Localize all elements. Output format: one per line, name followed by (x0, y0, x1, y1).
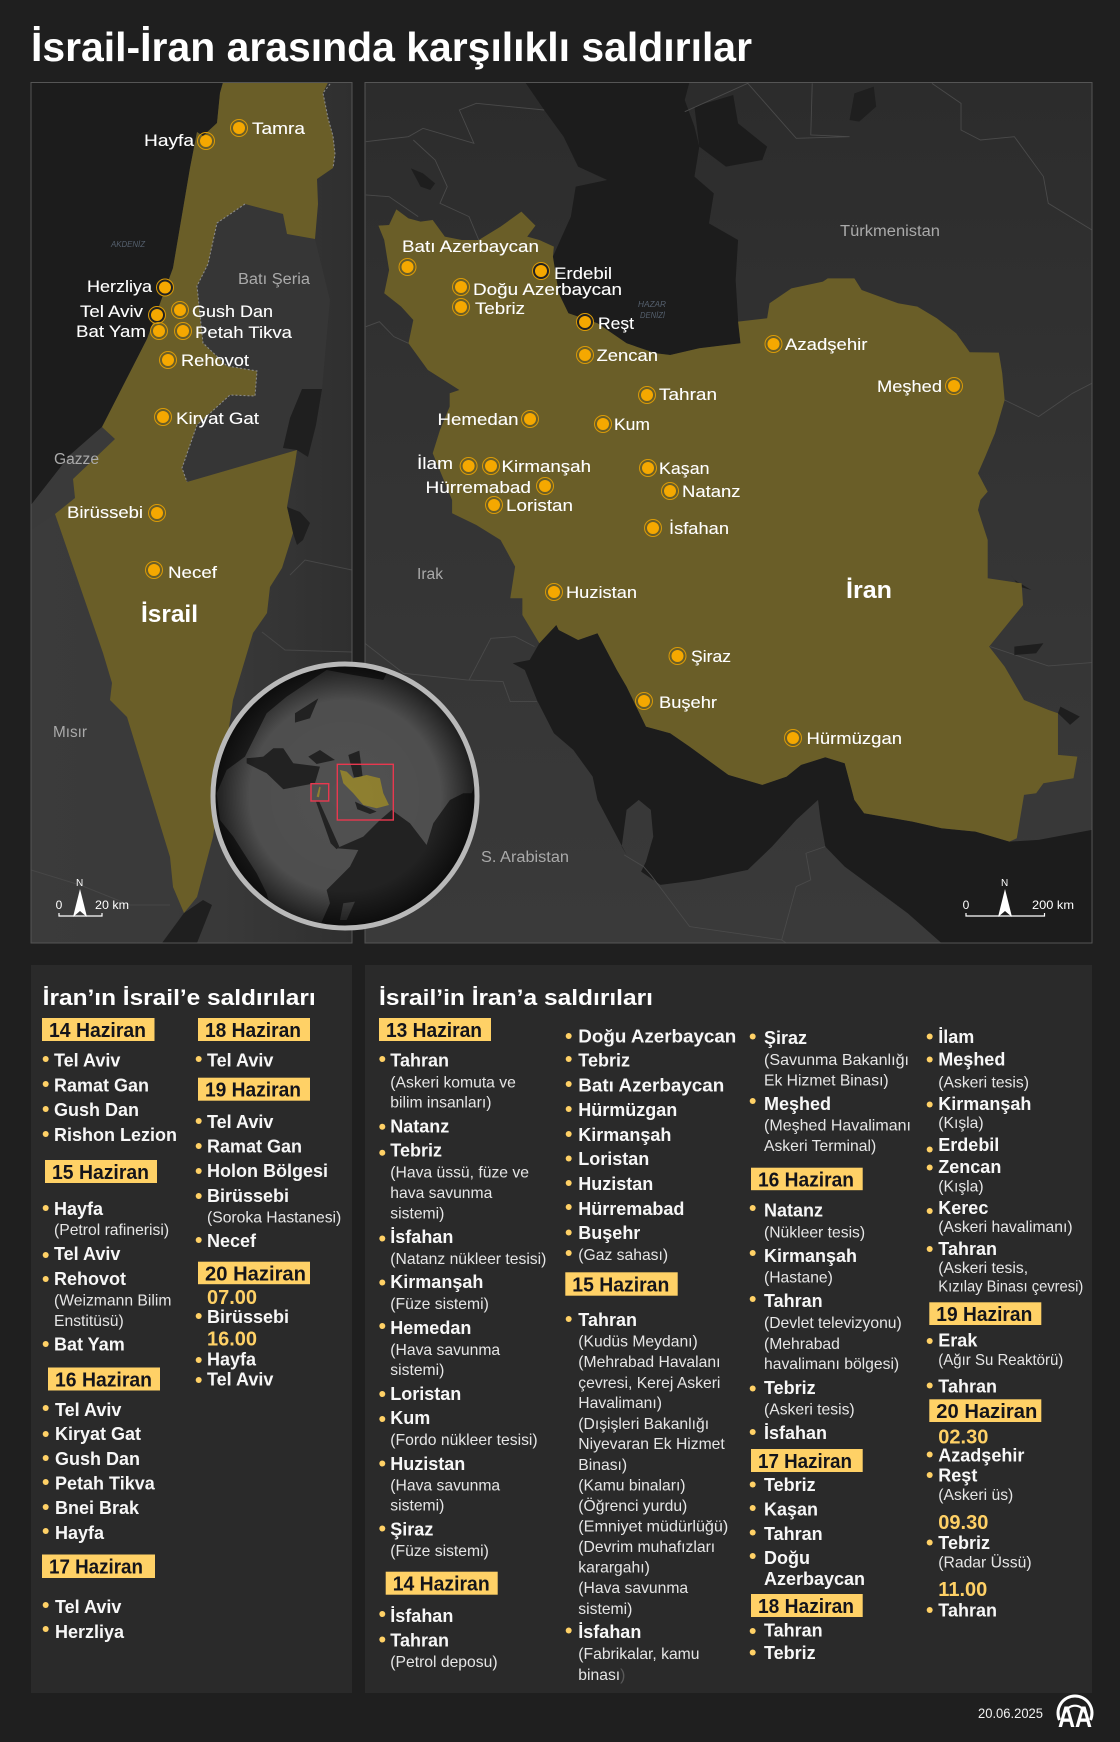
marker: Kirmanşah: Kirmanşah (502, 457, 591, 476)
marker: Birüssebi: Birüssebi (67, 503, 143, 522)
Dead Sea (283, 389, 322, 457)
marker: Hayfa: Hayfa (144, 131, 195, 150)
date block: 13 Haziran: sistemi) (390, 1362, 444, 1379)
marker: Meşhed: Meşhed (877, 377, 942, 396)
date block: 19 Haziran: Birüssebi (207, 1186, 289, 1206)
date block: 15 Haziran: (Kamu binaları) (578, 1478, 686, 1495)
date block: 18 Haziran: Tahran (938, 1239, 997, 1259)
list: 13 Haziran continued: Doğu Azerbaycan (578, 1026, 736, 1046)
label: İsrail: İsrail (141, 601, 198, 628)
date block: 13 Haziran: (Hava üssü, füze ve (390, 1165, 529, 1182)
marker: Hayfa (144, 131, 214, 150)
label: Türkmenistan: Türkmenistan (840, 223, 940, 240)
Red Sea (316, 802, 339, 849)
date block: 19 Haziran: Holon Bölgesi (207, 1161, 328, 1181)
marker: Erdebil: Erdebil (554, 264, 612, 283)
Iran territory (378, 209, 1077, 842)
marker: Tahran (638, 385, 717, 404)
marker: İlam (417, 454, 477, 474)
date block: 19 Haziran: (Ağır Su Reaktörü) (938, 1352, 1063, 1369)
date block: 15 Haziran: Binası) (578, 1457, 627, 1474)
date block: 18 Haziran: (Kışla) (938, 1179, 984, 1196)
marker: Kiryat Gat: Kiryat Gat (176, 409, 259, 428)
date block: 18 Haziran: Kirmanşah (938, 1094, 1031, 1114)
marker: Şiraz: Şiraz (691, 647, 731, 666)
marker: Hürmüzgan: Hürmüzgan (806, 729, 902, 748)
marker: Tamra (230, 119, 306, 138)
date block: 13 Haziran: Tebriz (390, 1141, 442, 1161)
date block: 19 Haziran: 19 Haziran (205, 1080, 301, 1102)
date block: 19 Haziran: Necef (207, 1231, 257, 1251)
date block: 20 Haziran: 16.00 (207, 1329, 257, 1351)
date block: 15 Haziran: (Petrol rafinerisi) (54, 1222, 169, 1239)
date block: 16 Haziran: 16 Haziran (758, 1170, 854, 1192)
date block: 15 Haziran: (Hava savunma (578, 1580, 688, 1597)
logo: Anadolu Agency: AA (1058, 1701, 1092, 1734)
marker: Reşt: Reşt (598, 314, 634, 333)
date block: 20 Haziran: 02.30 (938, 1426, 988, 1448)
date block: 14 Haziran (42, 1018, 177, 1145)
Black Sea (308, 750, 335, 764)
date block: 13 Haziran: Tahran (390, 1051, 449, 1071)
date block: 16 Haziran: (Askeri tesis) (764, 1401, 855, 1418)
date block: 15 Haziran (43, 1160, 171, 1355)
date block: 15 Haziran: (Dışişleri Bakanlığı (578, 1416, 709, 1433)
date block: 13 Haziran: Huzistan (390, 1454, 465, 1474)
date block: 14 Haziran (379, 1572, 498, 1671)
date block: 16 Haziran: Tebriz (764, 1378, 816, 1398)
date block: 16 Haziran: (Devlet televizyonu) (764, 1315, 902, 1332)
date block: 14 Haziran: Ramat Gan (54, 1076, 149, 1096)
Indian Ocean (322, 788, 474, 926)
date block: 18 Haziran: Meşhed (938, 1050, 1005, 1070)
date block: 18 Haziran: (Kışla) (938, 1115, 984, 1132)
date block: 14 Haziran: 14 Haziran (393, 1574, 490, 1596)
date block: 17 Haziran: Azerbaycan (764, 1569, 865, 1589)
date block: 16 Haziran: Tel Aviv (55, 1400, 121, 1420)
Gulf of Aqaba (162, 900, 212, 943)
date block: 20 Haziran: (Radar Üssü) (938, 1554, 1032, 1572)
marker: Loristan: Loristan (506, 496, 573, 515)
date block: 19 Haziran: Erak (938, 1331, 978, 1351)
Persian Gulf (355, 802, 377, 814)
list: 13 Haziran continued: Batı Azerbaycan (578, 1076, 724, 1096)
date block: 16 Haziran: Gush Dan (55, 1449, 140, 1469)
red locator box: Israel (311, 784, 329, 801)
date block: 20 Haziran: 09.30 (938, 1512, 988, 1534)
date block: 15 Haziran: çevresi, Kerej Askeri (578, 1375, 720, 1392)
date block: 16 Haziran: Tahran (764, 1291, 823, 1311)
date block: 15 Haziran: Askeri Terminal) (764, 1138, 876, 1155)
date block: 15 Haziran: Havalimanı) (578, 1395, 662, 1412)
date block: 19 Haziran (927, 1302, 1063, 1396)
list: 13 Haziran continued: Tebriz (578, 1051, 630, 1071)
scale bar: Israel map: N (76, 878, 83, 889)
panel: Iran map (365, 82, 1092, 943)
label: Akdeniz: AKDENİZ (110, 239, 146, 249)
Caspian Sea (525, 82, 740, 355)
marker: Zencan (576, 346, 658, 365)
date block: 18 Haziran: Tahran (764, 1621, 823, 1641)
date block: 15 Haziran: (Mehrabad Havalanı (578, 1354, 720, 1371)
date block: 18 Haziran (750, 1027, 1083, 1663)
date block: 16 Haziran: Bnei Brak (55, 1498, 140, 1518)
date block: 15 Haziran: (Meşhed Havalimanı (764, 1118, 911, 1135)
scale bar: Iran map (963, 878, 1074, 917)
date block: 13 Haziran: bilim insanları) (390, 1095, 491, 1112)
date block: 16 Haziran: Hayfa (55, 1523, 105, 1543)
marker: Petah Tikva: Petah Tikva (195, 323, 293, 342)
marker: Necef: Necef (168, 563, 217, 582)
date block: 20 Haziran: Tahran (938, 1601, 997, 1621)
label: Hazar Denizi: HAZAR (638, 299, 666, 309)
date stamp: 20.06.2025 (978, 1706, 1043, 1721)
label: Batı Şeria: Batı Şeria (238, 271, 310, 288)
inland lakes (411, 168, 435, 190)
date block: 16 Haziran (43, 1368, 160, 1543)
date block: 20 Haziran: Reşt (938, 1466, 977, 1486)
date block: 15 Haziran: binası) (578, 1667, 625, 1684)
date block: 15 Haziran: karargahı) (578, 1560, 650, 1577)
label: Mısır: Mısır (53, 724, 87, 741)
Madagascar (340, 902, 355, 920)
list: 13 Haziran continued: Kirmanşah (578, 1125, 671, 1145)
date block: 14 Haziran: Rishon Lezion (54, 1125, 177, 1145)
marker: Loristan (486, 496, 573, 515)
marker: Herzliya: Herzliya (87, 277, 153, 296)
marker: Kaşan: Kaşan (659, 459, 710, 478)
date block: 13 Haziran: (Hava savunma (390, 1478, 500, 1495)
Iran on globe (340, 770, 389, 808)
date block: 13 Haziran: İsfahan (390, 1227, 453, 1247)
date block: 15 Haziran: İsfahan (578, 1622, 641, 1642)
marker: Buşehr (636, 692, 717, 712)
date block: 16 Haziran: 16 Haziran (55, 1370, 152, 1392)
label: Hazar Denizi (638, 299, 666, 320)
date block: 18 Haziran: Tebriz (764, 1643, 816, 1663)
date block: 15 Haziran: Enstitüsü) (54, 1313, 124, 1330)
marker: Erdebil (532, 262, 612, 283)
Persian Gulf and Gulf of Oman (513, 625, 1092, 943)
marker: Reşt (576, 314, 634, 333)
scale bar: Israel map: 0 (56, 898, 63, 912)
list: 13 Haziran continued (566, 1026, 736, 1264)
date block: 13 Haziran: (Füze sistemi) (390, 1296, 489, 1313)
date block: 18 Haziran: Erdebil (938, 1135, 999, 1155)
date block: 20 Haziran: Birüssebi (207, 1307, 289, 1327)
date block: 20 Haziran (927, 1399, 1041, 1621)
marker: Hürremabad: Hürremabad (426, 478, 531, 497)
date block: 18 Haziran: 18 Haziran (205, 1020, 301, 1042)
date block: 16 Haziran (750, 1168, 902, 1443)
marker: Şiraz (669, 647, 731, 666)
Mediterranean sea (31, 82, 223, 505)
date block: 15 Haziran: (Öğrenci yurdu) (578, 1497, 687, 1515)
date block: 18 Haziran (196, 1018, 310, 1071)
panel: Israel's attacks on Iran (365, 965, 1092, 1693)
date block: 19 Haziran: (Soroka Hastanesi) (207, 1210, 341, 1227)
marker: Hemedan: Hemedan (438, 410, 518, 429)
marker: Natanz: Natanz (682, 482, 740, 501)
date block: 13 Haziran: sistemi) (390, 1206, 444, 1223)
date block: 17 Haziran: Herzliya (55, 1622, 125, 1642)
marker: İsfahan (644, 519, 729, 538)
Israel on globe (317, 787, 321, 797)
date block: 14 Haziran: (Petrol deposu) (390, 1654, 498, 1671)
scale bar: Israel map (56, 878, 129, 917)
date block: 15 Haziran: 15 Haziran (52, 1162, 149, 1184)
label: Irak: Irak (417, 566, 443, 583)
date block: 13 Haziran: (Fordo nükleer tesisi) (390, 1432, 538, 1449)
date block: 17 Haziran (750, 1449, 865, 1589)
date block: 15 Haziran: Meşhed (764, 1094, 831, 1114)
heading: İsrail’in İran’a saldırıları (379, 985, 653, 1010)
marker: Natanz (662, 482, 740, 501)
date block: 20 Haziran: (Askeri üs) (938, 1487, 1013, 1504)
date block: 17 Haziran: Tahran (764, 1524, 823, 1544)
marker: Rehovot: Rehovot (181, 351, 249, 370)
date block: 14 Haziran: Tel Aviv (54, 1051, 120, 1071)
date block: 15 Haziran: Hayfa (54, 1199, 104, 1219)
date block: 15 Haziran: (Savunma Bakanlığı (764, 1052, 909, 1069)
date block: 13 Haziran: 13 Haziran (386, 1020, 482, 1042)
date block: 15 Haziran: Tel Aviv (54, 1244, 120, 1264)
marker: Bat Yam: Bat Yam (76, 322, 146, 341)
date block: 17 Haziran: Kaşan (764, 1500, 818, 1520)
date block: 19 Haziran: Ramat Gan (207, 1137, 302, 1157)
date block: 18 Haziran: (Askeri havalimanı) (938, 1219, 1073, 1236)
date block: 15 Haziran: Rehovot (54, 1269, 126, 1289)
marker: Tamra: Tamra (252, 119, 306, 138)
marker: Tahran: Tahran (659, 385, 717, 404)
country borders (365, 83, 1092, 943)
scale bar: Israel map: 20 km (95, 898, 129, 912)
marker: Tel Aviv (80, 302, 166, 324)
marker: Bat Yam (76, 322, 168, 341)
marker: Batı Azerbaycan (399, 237, 539, 276)
date block: 13 Haziran: (Natanz nükleer tesisi) (390, 1251, 546, 1268)
marker: Tebriz (452, 298, 525, 318)
heading: İran’ın İsrail’e saldırıları (43, 985, 316, 1010)
date block: 16 Haziran: (Hastane) (764, 1270, 833, 1287)
date block: 19 Haziran: 19 Haziran (936, 1304, 1032, 1326)
date block: 20 Haziran: Tebriz (938, 1533, 990, 1553)
label: Gazze: Gazze (54, 451, 99, 468)
Baltic Sea (295, 698, 318, 723)
date block: 13 Haziran: (Füze sistemi) (390, 1543, 489, 1560)
date block: 15 Haziran: Şiraz (764, 1028, 807, 1048)
date block: 20 Haziran: 11.00 (938, 1579, 987, 1601)
date block: 16 Haziran: Natanz (764, 1201, 823, 1221)
Israel territory (55, 82, 335, 913)
date block: 19 Haziran (196, 1078, 341, 1251)
date block: 20 Haziran: Tel Aviv (207, 1370, 273, 1390)
date block: 15 Haziran: (Devrim muhafızları (578, 1539, 715, 1556)
list: 13 Haziran continued: Loristan (578, 1149, 649, 1169)
date block: 16 Haziran: (Nükleer tesis) (764, 1225, 865, 1242)
date block: 18 Haziran: Kerec (938, 1198, 988, 1218)
panel: Israel map (31, 82, 352, 943)
Mediterranean Sea (247, 748, 320, 789)
Aral lake (850, 87, 876, 122)
date block: 20 Haziran: 20 Haziran (205, 1264, 306, 1286)
marker: Tebriz: Tebriz (475, 299, 525, 318)
date block: 18 Haziran: 18 Haziran (758, 1596, 854, 1618)
marker: Azadşehir: Azadşehir (785, 335, 868, 354)
date block: 14 Haziran: 14 Haziran (49, 1020, 146, 1042)
date block: 19 Haziran: Tahran (938, 1376, 997, 1396)
date block: 17 Haziran: Tebriz (764, 1475, 816, 1495)
date block: 17 Haziran: Doğu (764, 1548, 810, 1568)
date block: 20 Haziran: 20 Haziran (936, 1401, 1037, 1423)
marker: Buşehr: Buşehr (659, 693, 717, 712)
scale bar: Iran map: N (1001, 878, 1008, 889)
scale bar: Iran map: 0 (963, 898, 970, 912)
label: İran: İran (846, 577, 892, 604)
date block: 20 Haziran (196, 1262, 310, 1390)
date block: 13 Haziran: Hemedan (390, 1318, 471, 1338)
date block: 18 Haziran: Zencan (938, 1157, 1001, 1177)
title: İsrail-İran arasında karşılıklı saldırılar (31, 24, 752, 70)
Gaza strip (31, 427, 115, 530)
date block: 18 Haziran: Tel Aviv (207, 1051, 273, 1071)
date block: 13 Haziran: Kirmanşah (390, 1272, 483, 1292)
label: Hazar Denizi: DENİZİ (640, 310, 666, 320)
list: 13 Haziran continued: (Gaz sahası) (578, 1247, 668, 1264)
date block: 15 Haziran: Tahran (578, 1310, 637, 1330)
list: 13 Haziran continued: Huzistan (578, 1174, 653, 1194)
date block: 13 Haziran: Kum (390, 1408, 430, 1428)
date block: 17 Haziran: 17 Haziran (49, 1556, 143, 1578)
marker: Necef (146, 562, 217, 582)
date block: 13 Haziran: Natanz (390, 1117, 449, 1137)
marker: Huzistan: Huzistan (566, 583, 637, 602)
date block: 15 Haziran: Bat Yam (54, 1335, 125, 1355)
date block: 17 Haziran (42, 1554, 155, 1642)
date block: 15 Haziran: Niyevaran Ek Hizmet (578, 1436, 725, 1453)
Caspian Sea (348, 751, 363, 777)
date block: 14 Haziran: İsfahan (390, 1606, 453, 1626)
date block: 20 Haziran: Hayfa (207, 1350, 257, 1370)
date block: 18 Haziran: (Askeri tesis, (938, 1260, 1028, 1277)
date block: 15 Haziran: (Kudüs Meydanı) (578, 1334, 698, 1351)
marker: Tel Aviv: Tel Aviv (80, 302, 144, 321)
marker: Gush Dan: Gush Dan (192, 302, 273, 321)
date block: 18 Haziran: (Askeri tesis) (938, 1075, 1029, 1092)
label: S. Arabistan: S. Arabistan (481, 849, 569, 866)
date block: 16 Haziran: havalimanı bölgesi) (764, 1356, 899, 1373)
globe locator (207, 660, 483, 933)
Atlantic and Arctic (216, 666, 386, 900)
red locator box: Iran (337, 764, 393, 820)
date block: 13 Haziran: (Askeri komuta ve (390, 1075, 516, 1092)
date block: 16 Haziran: (Mehrabad (764, 1336, 840, 1353)
Kara-Bogaz lagoon (694, 95, 767, 167)
date block: 20 Haziran: 07.00 (207, 1287, 257, 1309)
marker: Kum: Kum (614, 415, 650, 434)
date block: 14 Haziran: Tahran (390, 1631, 449, 1651)
scale bar: Iran map: 200 km (1032, 898, 1074, 912)
date block: 18 Haziran: İlam (938, 1027, 974, 1047)
date block: 15 Haziran: (Fabrikalar, kamu (578, 1646, 699, 1663)
panel: Iran's attacks on Israel (31, 965, 352, 1693)
date block: 16 Haziran: İsfahan (764, 1423, 827, 1443)
date block: 19 Haziran: Tel Aviv (207, 1112, 273, 1132)
date block: 15 Haziran (565, 1028, 911, 1684)
date block: 15 Haziran: sistemi) (578, 1601, 632, 1618)
marker: Kaşan (640, 459, 710, 478)
date block: 15 Haziran: (Emniyet müdürlüğü) (578, 1519, 728, 1536)
marker: Batı Azerbaycan: Batı Azerbaycan (402, 237, 539, 256)
date block: 13 Haziran: Loristan (390, 1384, 461, 1404)
West Bank (182, 204, 330, 482)
date block: 13 Haziran: hava savunma (390, 1185, 493, 1202)
date block: 16 Haziran: Petah Tikva (55, 1474, 156, 1494)
date block: 18 Haziran: Kızılay Binası çevresi) (938, 1279, 1083, 1296)
date block: 13 Haziran: Şiraz (390, 1520, 433, 1540)
date block: 16 Haziran: Kirmanşah (764, 1246, 857, 1266)
marker: Zencan: Zencan (596, 346, 658, 365)
date block: 20 Haziran: Azadşehir (938, 1445, 1024, 1465)
date block: 15 Haziran: (Weizmann Bilim (54, 1293, 171, 1310)
marker: İlam: İlam (417, 454, 453, 473)
date block: 14 Haziran: Gush Dan (54, 1100, 139, 1120)
marker: İsfahan: İsfahan (669, 519, 729, 538)
date block: 13 Haziran: sistemi) (390, 1498, 444, 1515)
date block: 13 Haziran: (Hava savunma (390, 1342, 500, 1359)
date block: 13 Haziran (379, 1018, 546, 1560)
date block: 16 Haziran: Kiryat Gat (55, 1424, 141, 1444)
marker: Doğu Azerbaycan: Doğu Azerbaycan (473, 280, 622, 299)
date block: 17 Haziran: Tel Aviv (55, 1597, 121, 1617)
marker: Kum (594, 415, 650, 434)
list: 13 Haziran continued: Hürmüzgan (578, 1100, 677, 1120)
date block: 17 Haziran: 17 Haziran (758, 1451, 852, 1473)
list: 13 Haziran continued: Hürremabad (578, 1199, 684, 1219)
list: 13 Haziran continued: Buşehr (578, 1223, 640, 1243)
date block: 15 Haziran: Ek Hizmet Binası) (764, 1073, 889, 1090)
date block: 15 Haziran: 15 Haziran (572, 1274, 669, 1296)
